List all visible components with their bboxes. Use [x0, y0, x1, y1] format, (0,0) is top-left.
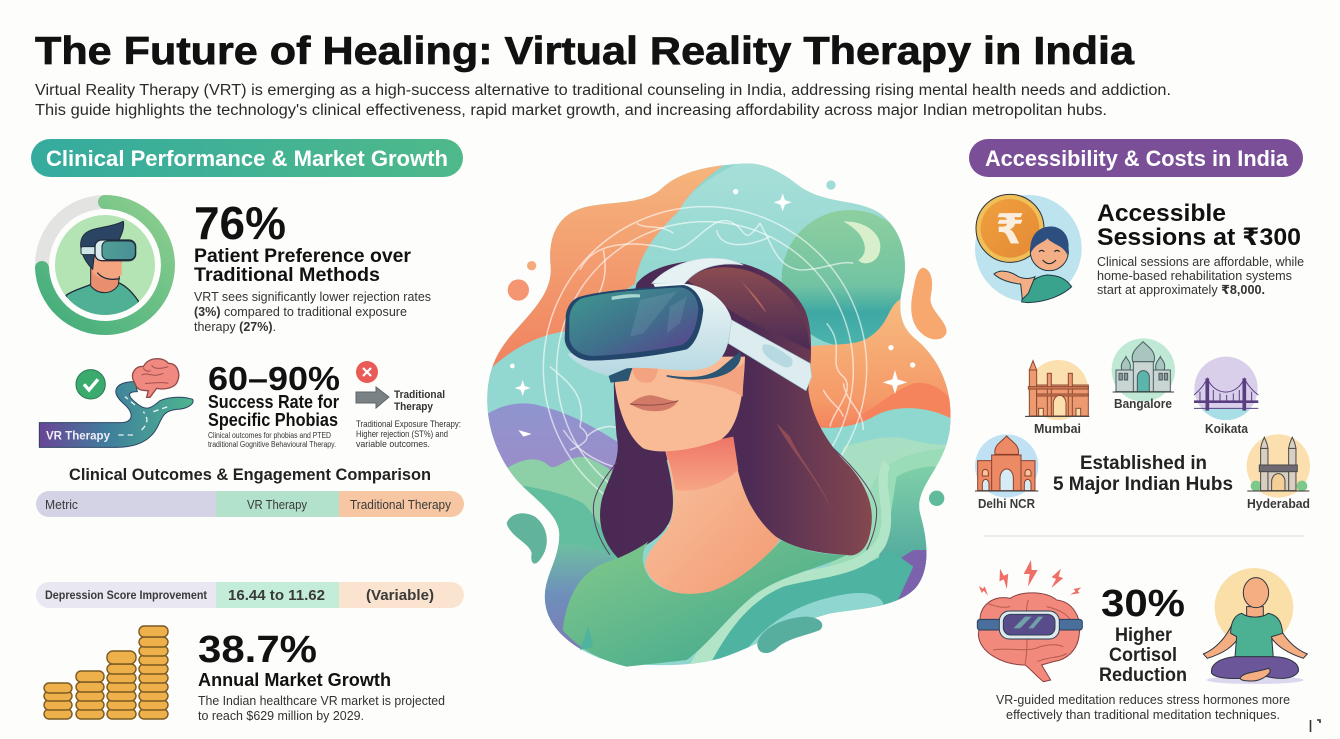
subheading: patient preference: Patient Preference over [194, 245, 411, 267]
description [198, 694, 445, 723]
subheading: higher cortisol reduction: Higher [1115, 625, 1173, 646]
heading: accessible sessions [1097, 200, 1301, 251]
description: The Indian healthcare VR market is projected [198, 694, 445, 708]
icon: Bangalore monument [1112, 338, 1175, 402]
traditional therapy note: Higher rejection (ST%) and [356, 429, 448, 440]
icon: traditional path arrow [356, 387, 389, 408]
neural network rings [543, 207, 867, 530]
label: Hyderabad: Hyderabad [1247, 497, 1310, 511]
stat: 38.7%: 38.7% [198, 629, 317, 671]
icon: stressed brain with VR goggles [976, 560, 1083, 682]
label: VR Therapy: VR Therapy [46, 428, 110, 442]
face [614, 357, 745, 451]
center label: 5 major hubs [1053, 452, 1233, 495]
icon: meditating person [1203, 568, 1307, 684]
traditional therapy note: variable outcomes. [356, 439, 430, 450]
table row: depression score: Depression Score Improvement [45, 588, 207, 602]
description [194, 289, 431, 334]
icon: Kolkata bridge [1194, 357, 1258, 420]
description: VR-guided meditation reduces stress hormones more [996, 693, 1290, 707]
title: The Future of Healing: Virtual Reality Therapy in India [35, 30, 1134, 73]
heading pill: Clinical Performance & Market Growth [31, 139, 463, 177]
description [996, 693, 1290, 722]
hero illustration: woman wearing VR headset [480, 150, 960, 683]
icon: Hyderabad Charminar [1247, 434, 1310, 498]
visor [565, 285, 703, 361]
nose [632, 367, 658, 383]
table header row: Metric [45, 498, 78, 512]
icon: Mumbai Gateway of India [1025, 360, 1089, 420]
subheading: patient preference: Traditional Methods [194, 264, 380, 286]
green shirt [563, 540, 847, 667]
intro paragraph [35, 82, 1171, 119]
icon: coin stacks [44, 626, 168, 719]
stat: 30%: 30% [1101, 583, 1185, 625]
icon: VR therapy road to brain [39, 359, 193, 447]
subheading: patient preference [194, 245, 411, 286]
table header row: Traditional Therapy [350, 498, 452, 512]
table row: depression score: 16.44 to 11.62 [228, 587, 325, 604]
VR headset [565, 258, 812, 391]
icon: check badge [76, 370, 105, 399]
description: Clinical sessions are affordable, while [1097, 255, 1304, 269]
heading pill: Accessibility & Costs in India: Accessibility & Costs in India [985, 146, 1289, 171]
panel: 60-90% success rate [39, 359, 461, 450]
traditional therapy note: Traditional Exposure Therapy: [356, 419, 461, 430]
icon: Delhi gate [975, 434, 1038, 498]
label: Traditional Therapy: Therapy [394, 401, 434, 413]
fine print: traditional Gognitive Behavioural Therapy. [208, 440, 336, 449]
lips [630, 395, 678, 411]
table header row [36, 491, 464, 517]
description: (3%) compared to traditional exposure [194, 304, 407, 319]
side strap [728, 320, 812, 391]
comparison table [36, 491, 464, 608]
description: therapy (27%). [194, 319, 276, 334]
heading pill: Clinical Performance & Market Growth: Clinical Performance & Market Growth [46, 146, 448, 171]
progress ring with VR user icon [42, 202, 168, 328]
panel: indian hubs [975, 338, 1310, 511]
description [1097, 255, 1304, 297]
neck and chest [645, 443, 780, 595]
heading: accessible sessions: Accessible [1097, 200, 1226, 227]
sparkles and dots [510, 189, 915, 437]
intro paragraph: Virtual Reality Therapy (VRT) is emerging as a high-success alternative to traditional counseling in India, addressing rising mental health needs and addiction. [35, 82, 1171, 99]
subheading: higher cortisol reduction [1099, 625, 1187, 686]
hair [593, 260, 877, 558]
comparison heading: Clinical Outcomes & Engagement Comparison [69, 465, 431, 484]
table row: depression score [36, 582, 464, 608]
intro paragraph: This guide highlights the technology's clinical effectiveness, rapid market growth, and increasing affordability across major Indian metropolitan hubs. [35, 102, 1107, 119]
subheading: success rate [208, 392, 339, 430]
icon: person with rupee coin [975, 194, 1082, 303]
top strap [652, 258, 743, 285]
icon: red cross badge [356, 361, 378, 383]
icon: person with rupee coin: ₹ [995, 204, 1024, 253]
label: Bangalore: Bangalore [1114, 397, 1172, 411]
center label: 5 major hubs: Established in [1080, 452, 1207, 474]
center label: 5 major hubs: 5 Major Indian Hubs [1053, 473, 1233, 495]
background swirl [480, 150, 960, 683]
description: VRT sees significantly lower rejection rates [194, 289, 431, 304]
nose gasket [608, 352, 741, 383]
panel: 76% patient preference [42, 197, 431, 334]
description: effectively than traditional meditation techniques. [1006, 708, 1280, 722]
description: start at approximately ₹8,000. [1097, 283, 1265, 297]
heading pill: Accessibility & Costs in India [969, 139, 1303, 177]
headset shell [567, 284, 732, 376]
stat: 76%: 76% [194, 197, 286, 249]
stat: 60-90%: 60–90% [208, 360, 340, 397]
panel: cortisol reduction [976, 560, 1307, 722]
panel: market growth [44, 626, 445, 723]
label: Traditional Therapy [394, 389, 445, 413]
subheading: higher cortisol reduction: Cortisol [1109, 645, 1177, 666]
description: home-based rehabilitation systems [1097, 269, 1292, 283]
label: Delhi NCR: Delhi NCR [978, 497, 1035, 511]
table row: depression score: (Variable) [366, 587, 434, 604]
fine print [208, 431, 336, 449]
label: Traditional Therapy: Traditional [394, 389, 445, 401]
panel: accessible sessions [975, 194, 1304, 303]
description: to reach $629 million by 2029. [198, 709, 364, 723]
label: Kolkata: Koikata [1205, 422, 1249, 436]
label: Mumbai: Mumbai [1034, 422, 1081, 436]
floating blobs [507, 180, 947, 653]
fine print: Clinical outcomes for phobias and PTED [208, 431, 331, 440]
traditional therapy note [356, 419, 461, 450]
icon: brain [133, 359, 179, 397]
heading: accessible sessions: Sessions at ₹300 [1097, 224, 1301, 251]
subheading: annual market growth: Annual Market Growth [198, 670, 391, 690]
corner mark [1310, 720, 1320, 732]
subheading: success rate: Success Rate for [208, 392, 339, 412]
table header row: VR Therapy [247, 498, 308, 512]
subheading: higher cortisol reduction: Reduction [1099, 665, 1187, 686]
subheading: success rate: Specific Phobias [208, 410, 338, 430]
